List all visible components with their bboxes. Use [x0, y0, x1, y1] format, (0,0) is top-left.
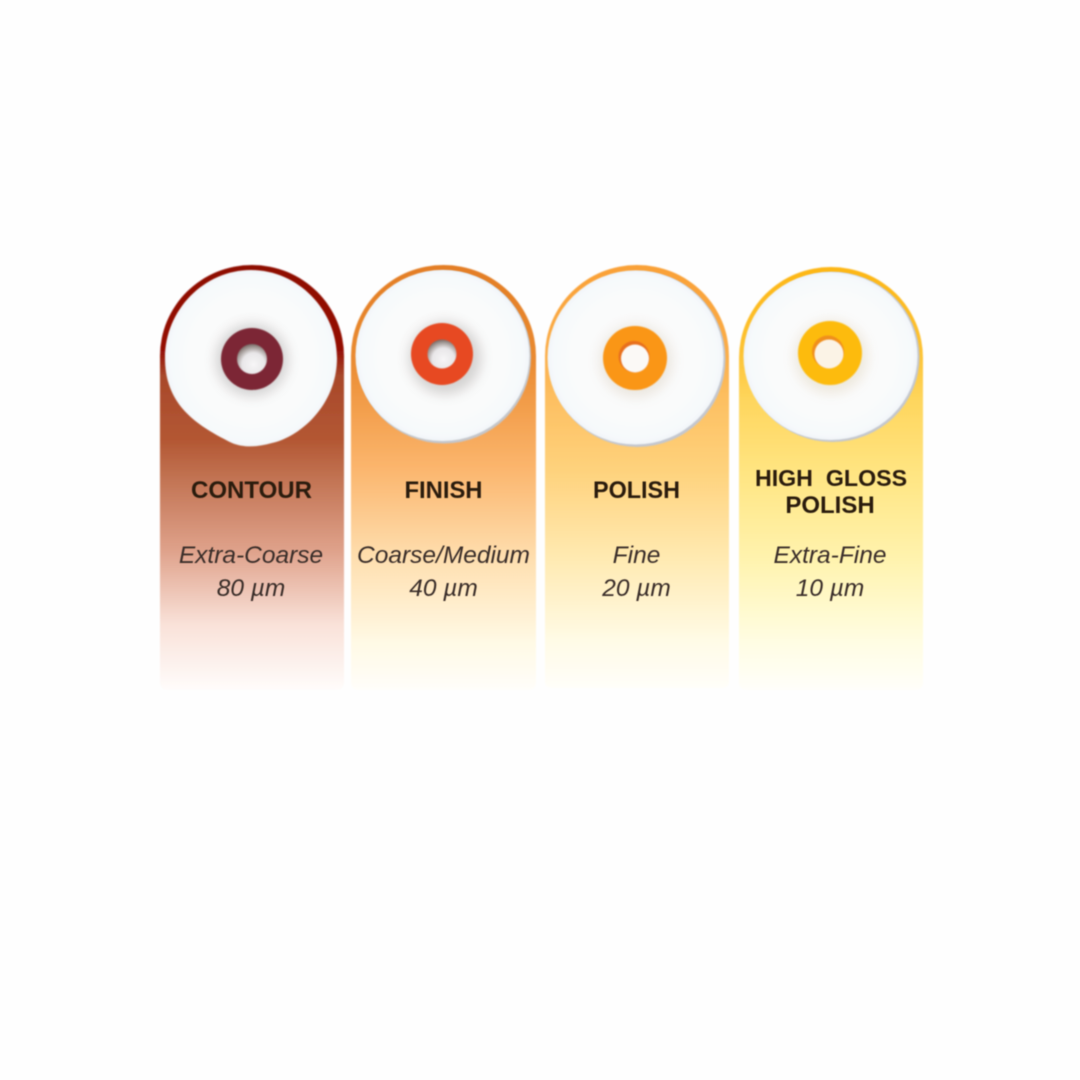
card shape: polish: [545, 265, 729, 688]
label: finish: FINISH: [404, 477, 482, 504]
grit: extra-coarse 80 µm: 80 µm: [217, 575, 285, 602]
abrasive disc: contour: [165, 270, 337, 446]
label: high gloss polish: HIGH GLOSS: [755, 465, 907, 491]
abrasive disc: high gloss polish: [744, 272, 920, 442]
abrasive disc: polish: [548, 270, 726, 447]
card shape: contour: [160, 265, 344, 690]
panel: polish: [545, 265, 729, 688]
grit: fine 20 µm: Fine: [613, 542, 660, 569]
abrasive disc: finish: [356, 270, 531, 444]
card shape: finish: [351, 265, 536, 690]
grit: extra-coarse 80 µm: Extra-Coarse: [179, 542, 323, 569]
label: high gloss polish: POLISH: [785, 492, 875, 519]
panel: contour: [160, 265, 344, 690]
panel: high gloss polish: [739, 267, 923, 690]
grit: extra-fine 10 µm: 10 µm: [796, 575, 864, 602]
card shape: high gloss polish: [739, 267, 923, 690]
grit: coarse/medium 40 µm: 40 µm: [409, 575, 478, 602]
grit: coarse/medium 40 µm: Coarse/Medium: [357, 542, 530, 569]
label: contour: CONTOUR: [191, 477, 312, 504]
panel: finish: [351, 265, 536, 690]
grit: fine 20 µm: 20 µm: [601, 575, 671, 602]
grit: extra-fine 10 µm: Extra-Fine: [773, 542, 887, 569]
label: polish: POLISH: [593, 477, 680, 504]
